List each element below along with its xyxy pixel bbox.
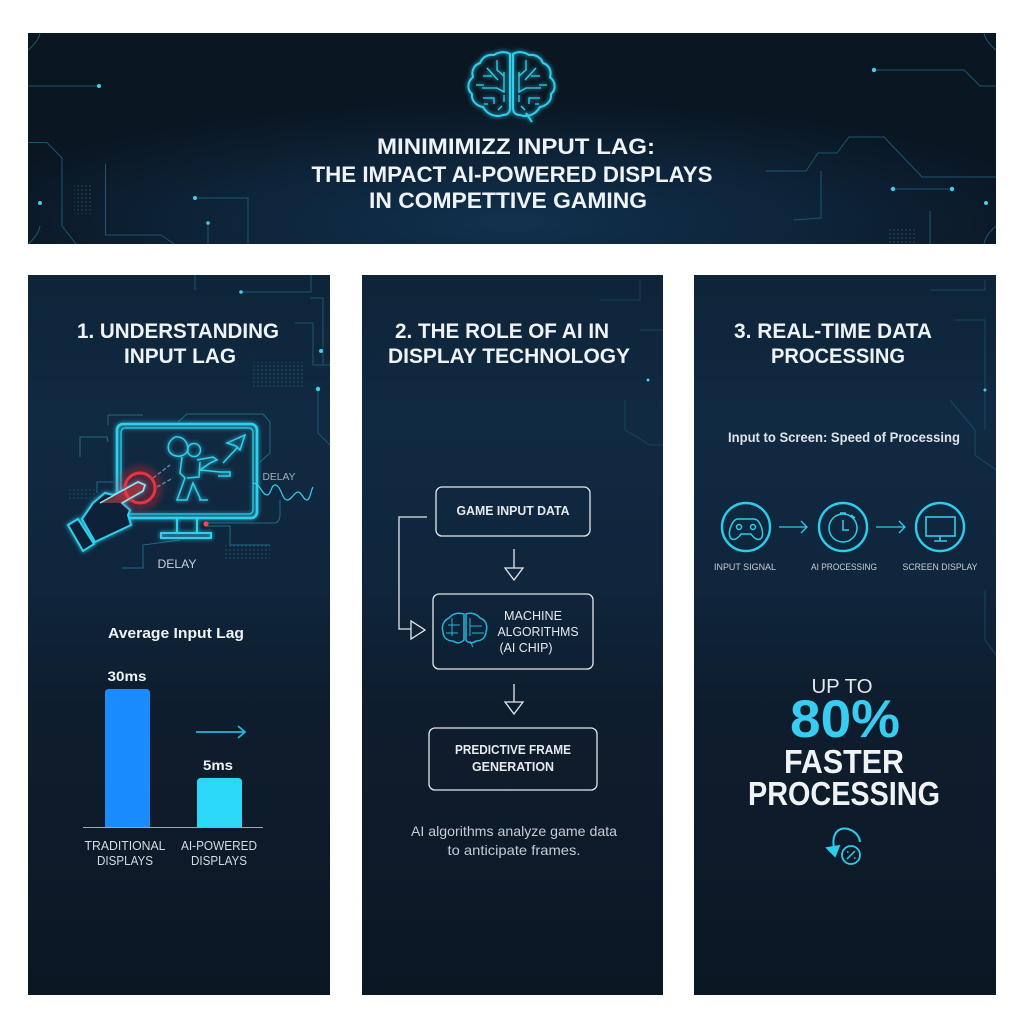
heading: 1. UNDERSTANDING [77,320,279,343]
description: to anticipate frames. [448,842,580,858]
heading: INPUT LAG [124,345,236,368]
callout: 80% faster: 80% [790,690,900,749]
illustration: input lag monitor [68,414,313,571]
icon: brain [468,52,555,122]
icon: refresh percent [827,829,860,864]
flowchart: GAME INPUT DATA [456,504,570,518]
heading: PROCESSING [771,345,905,368]
callout: 80% faster: FASTER [784,743,904,780]
heading [77,320,279,368]
process flow: INPUT SIGNAL [714,562,776,573]
chart: average input lag: Average Input Lag [108,626,244,642]
flowchart: ALGORITHMS [498,625,578,639]
title [312,134,712,213]
chart: average input lag: TRADITIONAL [84,839,166,853]
flowchart: MACHINE [504,609,562,623]
illustration: input lag monitor: DELAY [262,471,296,483]
header panel [28,33,996,244]
title: MINIMIMIZZ INPUT LAG: [377,134,655,159]
flowchart: (AI CHIP) [500,641,552,655]
chart: average input lag: DISPLAYS [97,854,153,868]
title: THE IMPACT AI-POWERED DISPLAYS [312,162,712,187]
process flow: SCREEN DISPLAY [902,562,978,573]
description [411,823,617,858]
callout: 80% faster: UP TO [812,675,872,698]
heading: DISPLAY TECHNOLOGY [388,345,630,368]
panel: role of AI [362,275,663,995]
flowchart [399,487,597,790]
process flow: AI PROCESSING [811,562,877,573]
callout: 80% faster: PROCESSING [748,775,940,812]
icon: stopwatch [829,513,857,542]
chart: average input lag: 30ms [108,668,147,684]
chart: average input lag: AI-POWERED [181,839,257,853]
heading [388,320,630,368]
flowchart: PREDICTIVE FRAME [455,743,571,757]
flowchart: GENERATION [472,760,554,774]
chart: average input lag: DISPLAYS [191,854,247,868]
title: IN COMPETTIVE GAMING [369,188,647,213]
process flow [714,503,978,573]
description: AI algorithms analyze game data [411,823,617,839]
chart: average input lag: 5ms [203,757,233,773]
illustration: input lag monitor: DELAY [158,559,197,571]
icon: small brain [442,613,487,647]
panel: real-time data processing [694,275,996,995]
chart: average input lag [83,626,263,868]
heading: 3. REAL-TIME DATA [734,320,932,343]
heading [734,320,932,368]
icon: monitor [926,517,955,541]
callout: 80% faster [748,675,940,812]
subheading: Input to Screen: Speed of Processing [728,430,960,445]
icon: gamepad [729,519,763,539]
panel: understanding input lag [28,275,330,995]
heading: 2. THE ROLE OF AI IN [395,320,609,343]
